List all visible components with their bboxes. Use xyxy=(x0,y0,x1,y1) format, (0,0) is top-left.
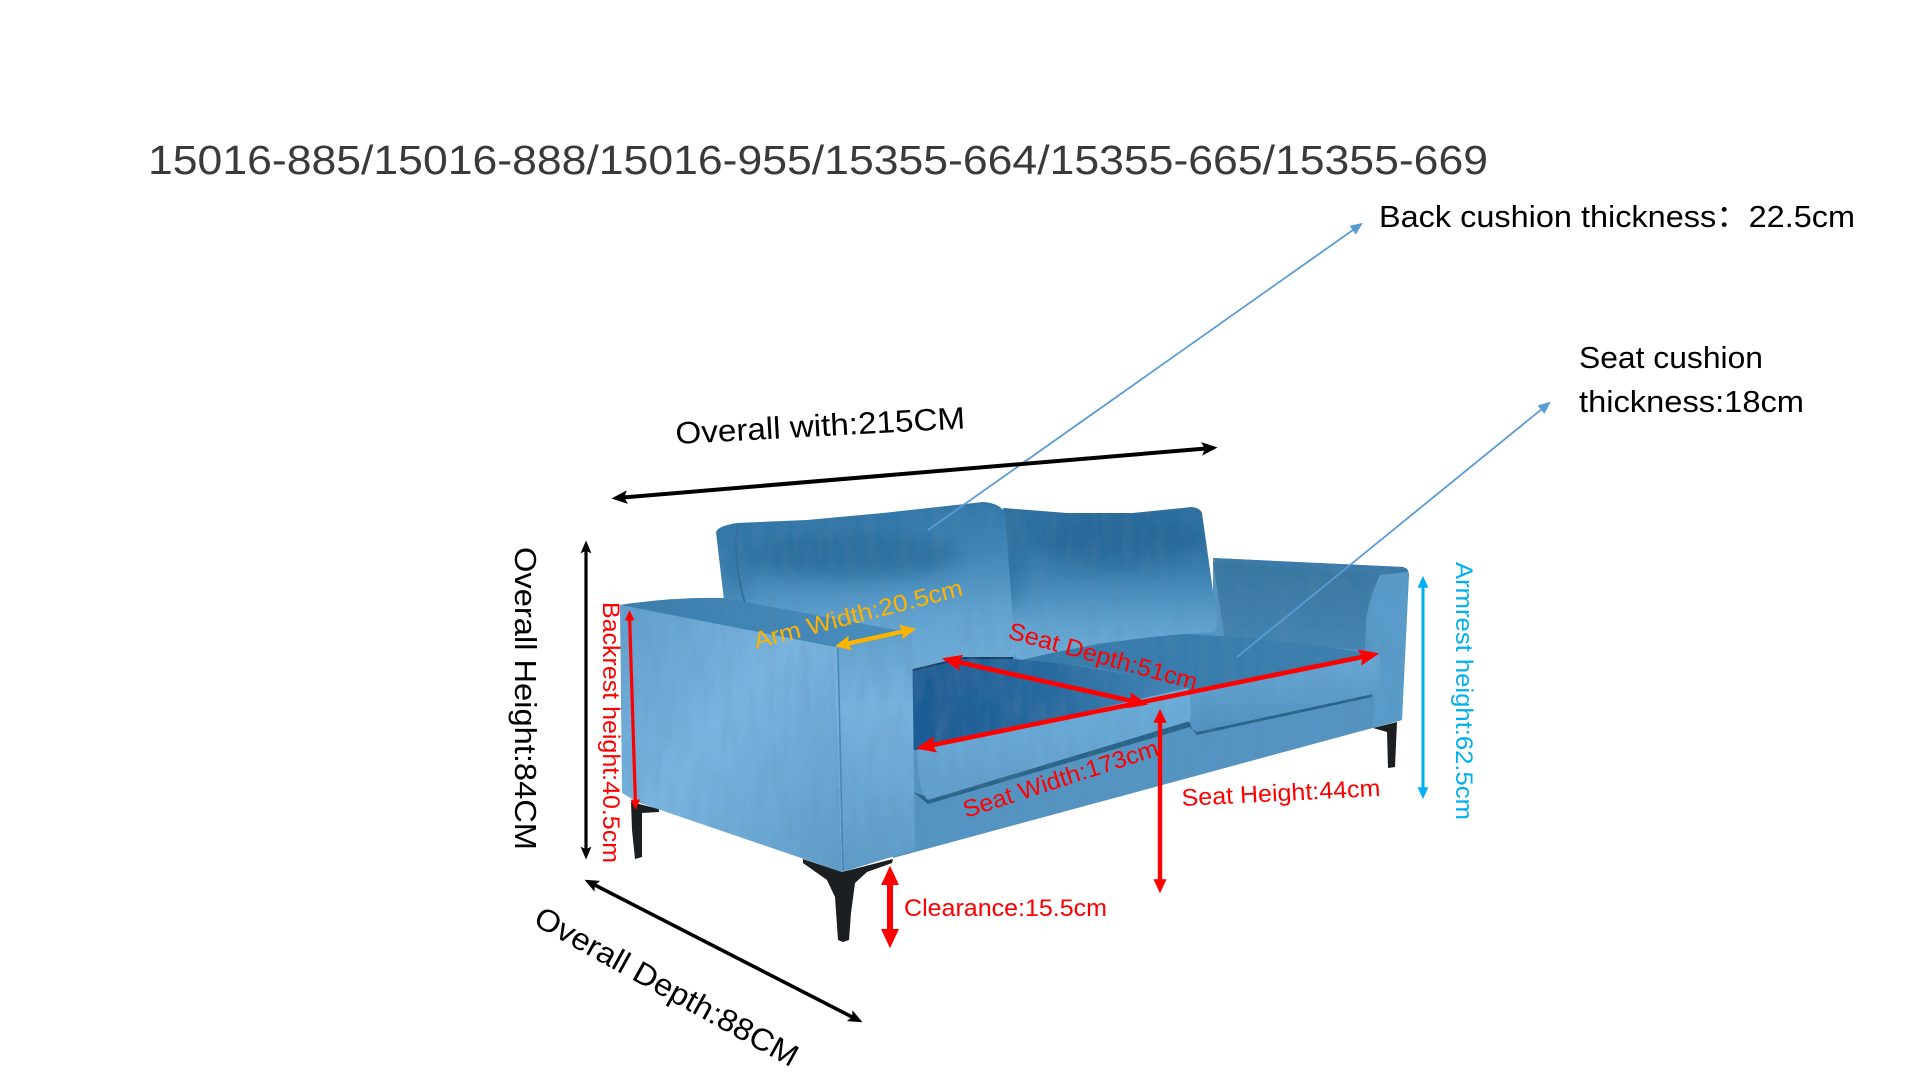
arrow: seat height xyxy=(1158,714,1162,888)
leader line: seat cushion xyxy=(1237,404,1548,657)
arrow: arm width xyxy=(841,630,910,645)
label: overall height: Overall Height:84CM xyxy=(508,547,543,850)
right arm top xyxy=(1213,558,1408,575)
right arm inner face xyxy=(1213,562,1380,650)
right back cushion xyxy=(996,507,1217,662)
arrow: seat width xyxy=(923,655,1372,747)
title: model numbers: 15016-885/15016-888/15016-955/15355-664/15355-665/15355-669 xyxy=(148,137,1488,183)
label: armrest height: Armrest height:62.5cm xyxy=(1450,562,1477,820)
arrow: clearance xyxy=(887,873,893,941)
label: seat cushion thickness: thickness:18cm xyxy=(1579,384,1804,419)
arrow: armrest height xyxy=(1422,580,1424,795)
left seat cushion xyxy=(905,658,1191,800)
arrow: overall height xyxy=(584,545,588,855)
label: clearance: Clearance:15.5cm xyxy=(904,895,1107,922)
label: arm width: Arm Width:20.5cm xyxy=(751,575,966,655)
sofa legs xyxy=(631,722,1397,942)
leader line: back cushion xyxy=(928,225,1360,530)
arrow: overall depth xyxy=(589,882,858,1020)
label: seat height: Seat Height:44cm xyxy=(1181,775,1381,812)
velvet upholstery xyxy=(620,502,1409,872)
left arm front panel xyxy=(835,633,915,872)
label: overall width: Overall with:215CM xyxy=(674,400,966,451)
label: seat cushion thickness xyxy=(1579,340,1804,419)
right seat cushion xyxy=(1013,634,1381,732)
label: backrest height: Backrest height:40.5cm xyxy=(597,602,624,863)
label: seat depth: Seat Depth:51cm xyxy=(1005,618,1201,696)
label: overall depth: Overall Depth:88CM xyxy=(529,900,804,1074)
arrow: seat depth xyxy=(949,660,1141,703)
label: seat cushion thickness: Seat cushion xyxy=(1579,340,1763,375)
right arm front xyxy=(1366,572,1408,728)
left arm side panel xyxy=(620,605,842,872)
left back cushion xyxy=(716,502,1015,670)
label: seat width: Seat Width:173cm xyxy=(960,735,1162,824)
dark gap under left cushion xyxy=(913,692,1372,804)
left arm top xyxy=(620,598,912,647)
arrow: backrest height xyxy=(630,614,636,806)
label: back cushion thickness: Back cushion thickness：22.5cm xyxy=(1379,199,1855,234)
sofa illustration xyxy=(620,502,1409,942)
sofa base and right arm xyxy=(893,558,1409,858)
arrow: overall width xyxy=(617,448,1212,498)
